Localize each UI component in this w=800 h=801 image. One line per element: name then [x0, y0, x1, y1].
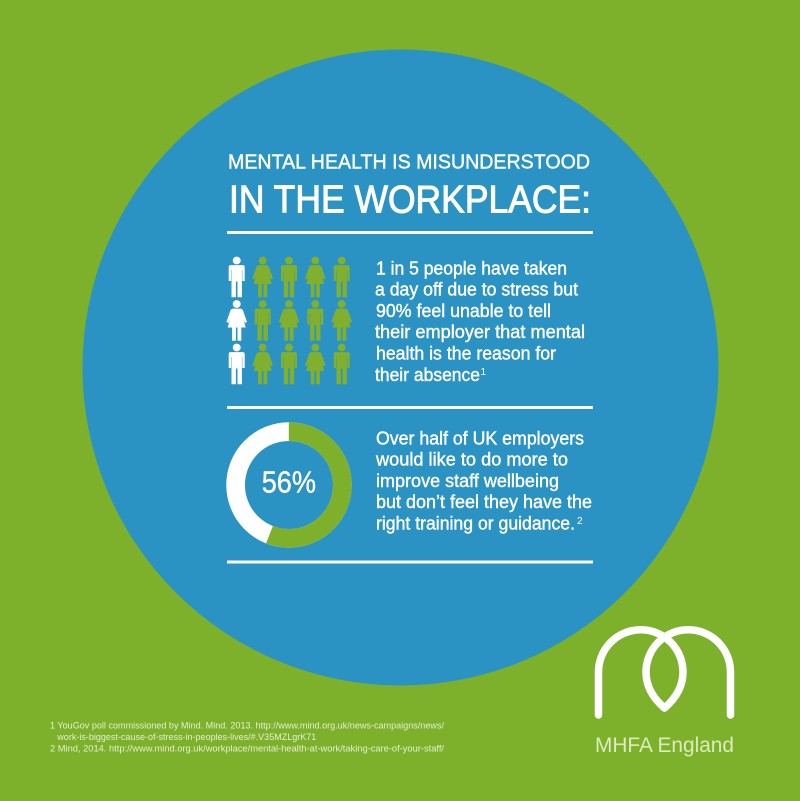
- logo mark: [598, 630, 730, 715]
- blue circle panel: [82, 50, 718, 686]
- footnotes: 1 YouGov poll commissioned by Mind. Mind. 2013. http://www.mind.org.uk/news-campaigns/news/: [50, 720, 444, 731]
- text block: stress statistic: a day off due to stress but: [375, 280, 578, 300]
- footnotes: work-is-biggest-cause-of-stress-in-peoples-lives/#.V35MZLgrK71: [56, 732, 316, 743]
- text block: employers statistic: right training or guidance.: [376, 514, 575, 534]
- title line 2: IN THE WORKPLACE:: [229, 179, 591, 222]
- donut value (green): [236, 432, 342, 538]
- text block: stress statistic: their absence: [375, 365, 480, 385]
- text block: employers statistic: [375, 428, 592, 534]
- divider bottom: [227, 560, 593, 564]
- footnotes: 2 Mind, 2014. http://www.mind.org.uk/workplace/mental-health-at-work/taking-care-of-your-staff/: [50, 743, 444, 754]
- green figures: [252, 257, 352, 384]
- text block: employers statistic: Over half of UK employers: [376, 428, 584, 448]
- logo wordmark: MHFA England: [595, 734, 734, 757]
- donut label: 56%: [262, 464, 316, 499]
- text block: employers statistic: improve staff wellbeing: [376, 471, 559, 491]
- text block: stress statistic: their employer that mental: [375, 322, 585, 342]
- donut track (white): [236, 432, 342, 538]
- text block: employers statistic: but don’t feel they have the: [376, 492, 592, 512]
- text block: stress statistic: 1 in 5 people have taken: [376, 258, 567, 278]
- footnotes: [50, 720, 444, 754]
- text block: stress statistic: 90% feel unable to tell: [376, 301, 551, 321]
- text block: employers statistic: 2: [577, 516, 583, 527]
- donut chart: 56%: [236, 432, 342, 538]
- text block: stress statistic: [375, 258, 585, 385]
- title line 1: MENTAL HEALTH IS MISUNDERSTOOD: [228, 151, 590, 173]
- text block: stress statistic: 1: [480, 367, 486, 378]
- text block: employers statistic: would like to do more to: [375, 450, 568, 470]
- divider under title: [227, 231, 593, 234]
- title: [228, 151, 591, 222]
- text block: stress statistic: health is the reason for: [376, 344, 556, 364]
- MHFA England logo: [595, 630, 734, 757]
- pictogram: 1 in 5 people: [226, 257, 352, 384]
- white figures column: [226, 257, 247, 384]
- divider between sections: [227, 406, 593, 409]
